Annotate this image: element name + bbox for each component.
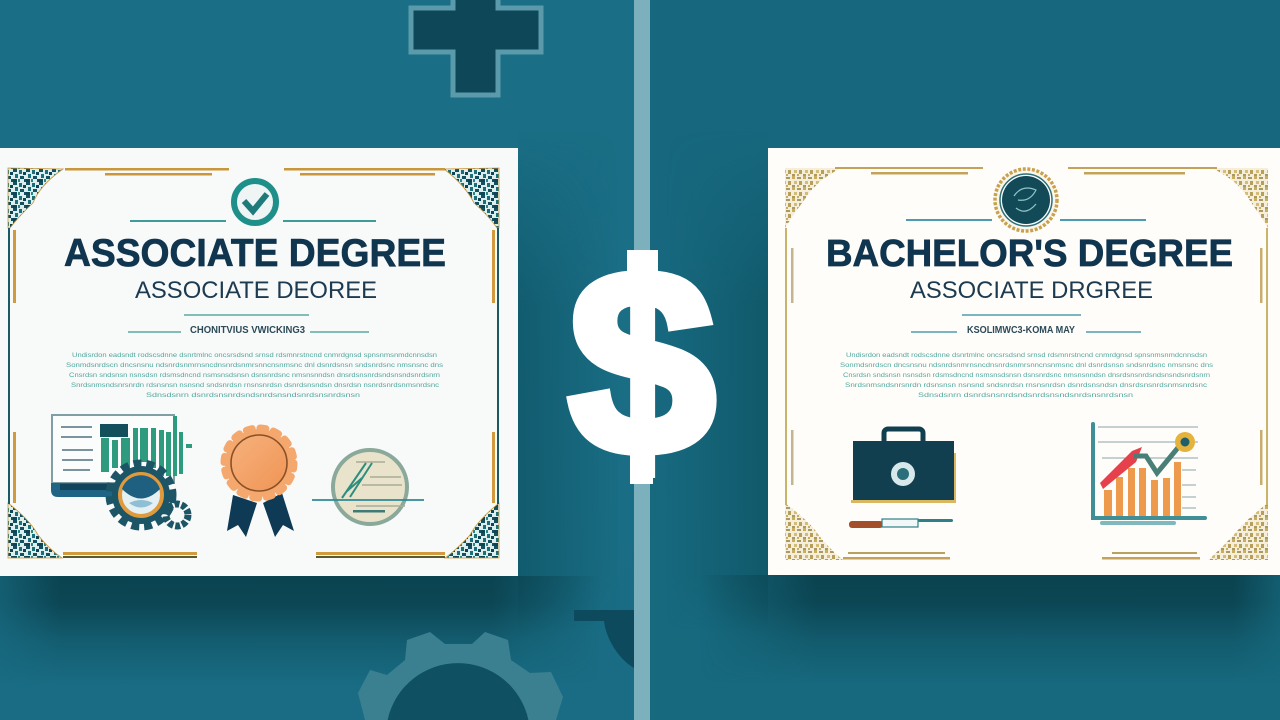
panel: associate degree certificate bbox=[0, 148, 518, 576]
seal side rules bbox=[906, 219, 1146, 221]
body text: Sdnsdsnrn dsnrdsnsnrdsndsnrdsnsndsnrdsnsnrdsnsn bbox=[146, 392, 361, 399]
seal side rules bbox=[130, 220, 376, 222]
border frame lines bbox=[785, 167, 1268, 560]
ornament: bottom left corner bbox=[8, 503, 62, 558]
icon: screen with gear bbox=[51, 415, 192, 527]
ornament: top left corner bbox=[785, 168, 841, 228]
background: left teal half bbox=[0, 0, 640, 720]
center divider bar bbox=[634, 0, 650, 720]
heading: associate degree: ASSOCIATE DEGREE bbox=[64, 232, 446, 275]
rule below subheading bbox=[128, 315, 369, 332]
body text: Cnsrdsn sndsnsn nsnsdsn rdsmsdncnd nsmsnsdsnsn dsnsnrdsnc nmsnsnndsn dnsrdsnsnrdsndsnsndsnrdsnrn bbox=[843, 372, 1210, 379]
card background bbox=[0, 148, 518, 576]
icon: signed stamp bbox=[312, 450, 424, 524]
body text: Sdnsdsnrn dsnrdsnsnrdsndsnrdsnsndsnrdsnsnrdsnsn bbox=[918, 392, 1134, 399]
border frame lines bbox=[8, 168, 499, 558]
body text: Cnsrdsn sndsnsn nsnsdsn rdsmsdncnd nsmsnsdsnsn dsnsnrdsnc nmsnsnndsn dnsrdsnsnrdsndsnsndsnrdsnrn bbox=[69, 372, 440, 379]
ornament: top right corner bbox=[1212, 168, 1268, 228]
icon: ghost gear bbox=[358, 632, 563, 720]
background: right teal half bbox=[640, 0, 1280, 720]
icon: ghost wrench shape bbox=[574, 610, 634, 668]
rule below subheading bbox=[911, 315, 1141, 332]
icon: round university seal bbox=[995, 169, 1057, 231]
shadow under right certificate bbox=[724, 575, 1280, 664]
ornament: top left corner bbox=[8, 168, 63, 228]
soft shadow beside right certificate bbox=[705, 200, 768, 588]
heading: bachelor's degree: BACHELOR'S DEGREE bbox=[826, 233, 1233, 275]
icon: orange award rosette bbox=[224, 428, 294, 537]
body text bbox=[66, 352, 444, 399]
shadow under left certificate bbox=[0, 576, 581, 668]
icon: large dollar sign: $ bbox=[569, 216, 715, 509]
small caption: CHONITVIUS VWICKING3 bbox=[190, 325, 305, 336]
icon: check seal bbox=[234, 181, 276, 223]
body text bbox=[840, 352, 1214, 399]
body text: Undisrdon eadsndt rodscsdnne dsnrtmlnc oncsrsdsnd srnsd rdsmnrstncnd cnmrdgnsd spnsnmsnmdcnnsdsn bbox=[72, 352, 437, 359]
ornament: top right corner bbox=[444, 168, 499, 228]
subheading: ASSOCIATE DEOREE bbox=[135, 277, 377, 304]
body text: Sonmdsnrdscn dncsnsnu ndsnrdsnmrnsncdnsnrdsnmrsnncnsnmsnc dnl dsnrdsnsn sndsnrdsnc nmsnsnc dns bbox=[840, 362, 1214, 369]
ornament: bottom right corner bbox=[445, 503, 499, 558]
icon: ghost plus sign bbox=[411, 0, 541, 95]
subheading: ASSOCIATE DRGREE bbox=[910, 277, 1153, 304]
icon: briefcase bbox=[851, 429, 956, 503]
chart: growth bars with trend line bbox=[1093, 424, 1205, 525]
ornament: bottom right corner bbox=[1208, 503, 1268, 560]
card background bbox=[768, 148, 1280, 575]
ornament: bottom left corner bbox=[785, 503, 843, 560]
icon: pen bbox=[849, 519, 953, 528]
body text: Undisrdon eadsndt rodscsdnne dsnrtmlnc oncsrsdsnd srnsd rdsmnrstncnd cnmrdgnsd spnsnmsnmdcnnsdsn bbox=[846, 352, 1207, 359]
body text: Snrdsnmsndsnrsnrdn rdsnsnsn nsnsnd sndsnrdsn rnsnsnrdsn dsnrdsnsndsn dnsrdsnsnrdsnmsnrdsnc bbox=[845, 382, 1208, 389]
body text: Sonmdsnrdscn dncsnsnu ndsnrdsnmrnsncdnsnrdsnmrsnncnsnmsnc dnl dsnrdsnsn sndsnrdsnc nmsnsnc dns bbox=[66, 362, 444, 369]
small caption: KSOLIMWC3-KOMA MAY bbox=[967, 325, 1075, 336]
soft shadow beside left certificate bbox=[518, 190, 584, 581]
panel: bachelor's degree certificate bbox=[768, 148, 1280, 575]
body text: Snrdsnmsndsnrsnrdn rdsnsnsn nsnsnd sndsnrdsn rnsnsnrdsn dsnrdsnsndsn dnsrdsn nsnrdsnrdsnmsnrdsnc bbox=[71, 382, 440, 389]
